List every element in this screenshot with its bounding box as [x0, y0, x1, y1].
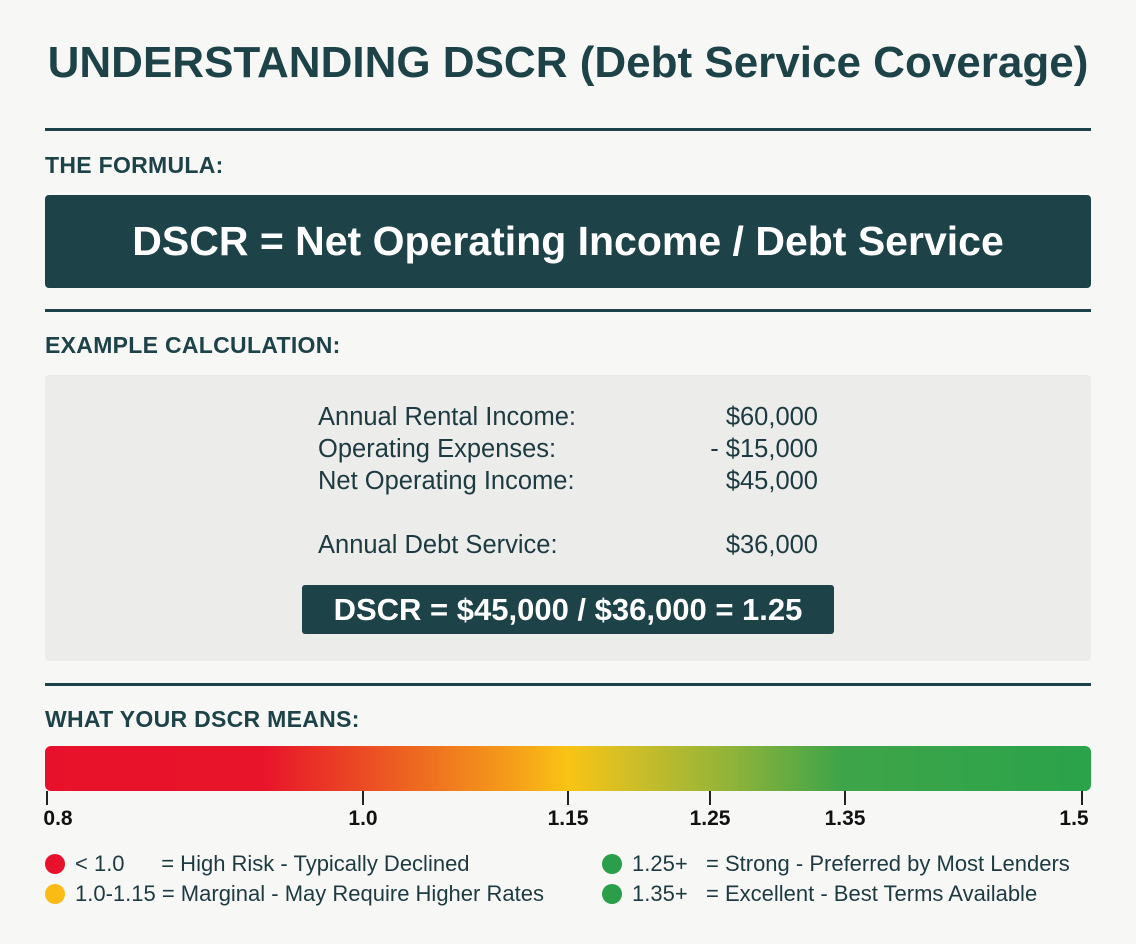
- calculation rows: - $15,000: [710, 435, 818, 463]
- legend: 1.25+ = Strong - Preferred by Most Lenders: [632, 851, 1070, 876]
- scale ticks and labels: 1.35: [825, 807, 865, 830]
- scale ticks and labels: 0.8: [43, 807, 73, 830]
- scale ticks and labels: 1.5: [1059, 807, 1089, 830]
- calculation rows: [318, 403, 818, 559]
- scale ticks and labels: 1.15: [548, 807, 588, 830]
- result box: [302, 585, 834, 634]
- calculation rows: Operating Expenses:: [318, 435, 556, 463]
- scale ticks and labels: [43, 791, 1089, 830]
- panel: example calculation: [45, 375, 1091, 661]
- formula box: DSCR = Net Operating Income / Debt Service: [132, 218, 1004, 264]
- calculation rows: $45,000: [726, 467, 818, 495]
- calculation rows: Annual Debt Service:: [318, 531, 558, 559]
- scale ticks and labels: 1.25: [690, 807, 730, 830]
- calculation rows: $60,000: [726, 403, 818, 431]
- heading: meaning: WHAT YOUR DSCR MEANS:: [45, 706, 360, 732]
- legend: [45, 851, 1070, 906]
- heading: formula: THE FORMULA:: [45, 152, 224, 178]
- scale ticks and labels: 1.0: [348, 807, 378, 830]
- calculation rows: $36,000: [726, 531, 818, 559]
- gradient bar: [45, 746, 1091, 791]
- result box: DSCR = $45,000 / $36,000 = 1.25: [334, 592, 802, 627]
- legend: < 1.0 = High Risk - Typically Declined: [75, 851, 470, 876]
- calculation rows: Annual Rental Income:: [318, 403, 576, 431]
- calculation rows: Net Operating Income:: [318, 467, 575, 495]
- title: UNDERSTANDING DSCR (Debt Service Coverage): [48, 38, 1088, 87]
- legend: 1.35+ = Excellent - Best Terms Available: [632, 881, 1037, 906]
- formula box: [45, 195, 1091, 288]
- legend: 1.0-1.15 = Marginal - May Require Higher Rates: [75, 881, 544, 906]
- heading: example: EXAMPLE CALCULATION:: [45, 332, 341, 358]
